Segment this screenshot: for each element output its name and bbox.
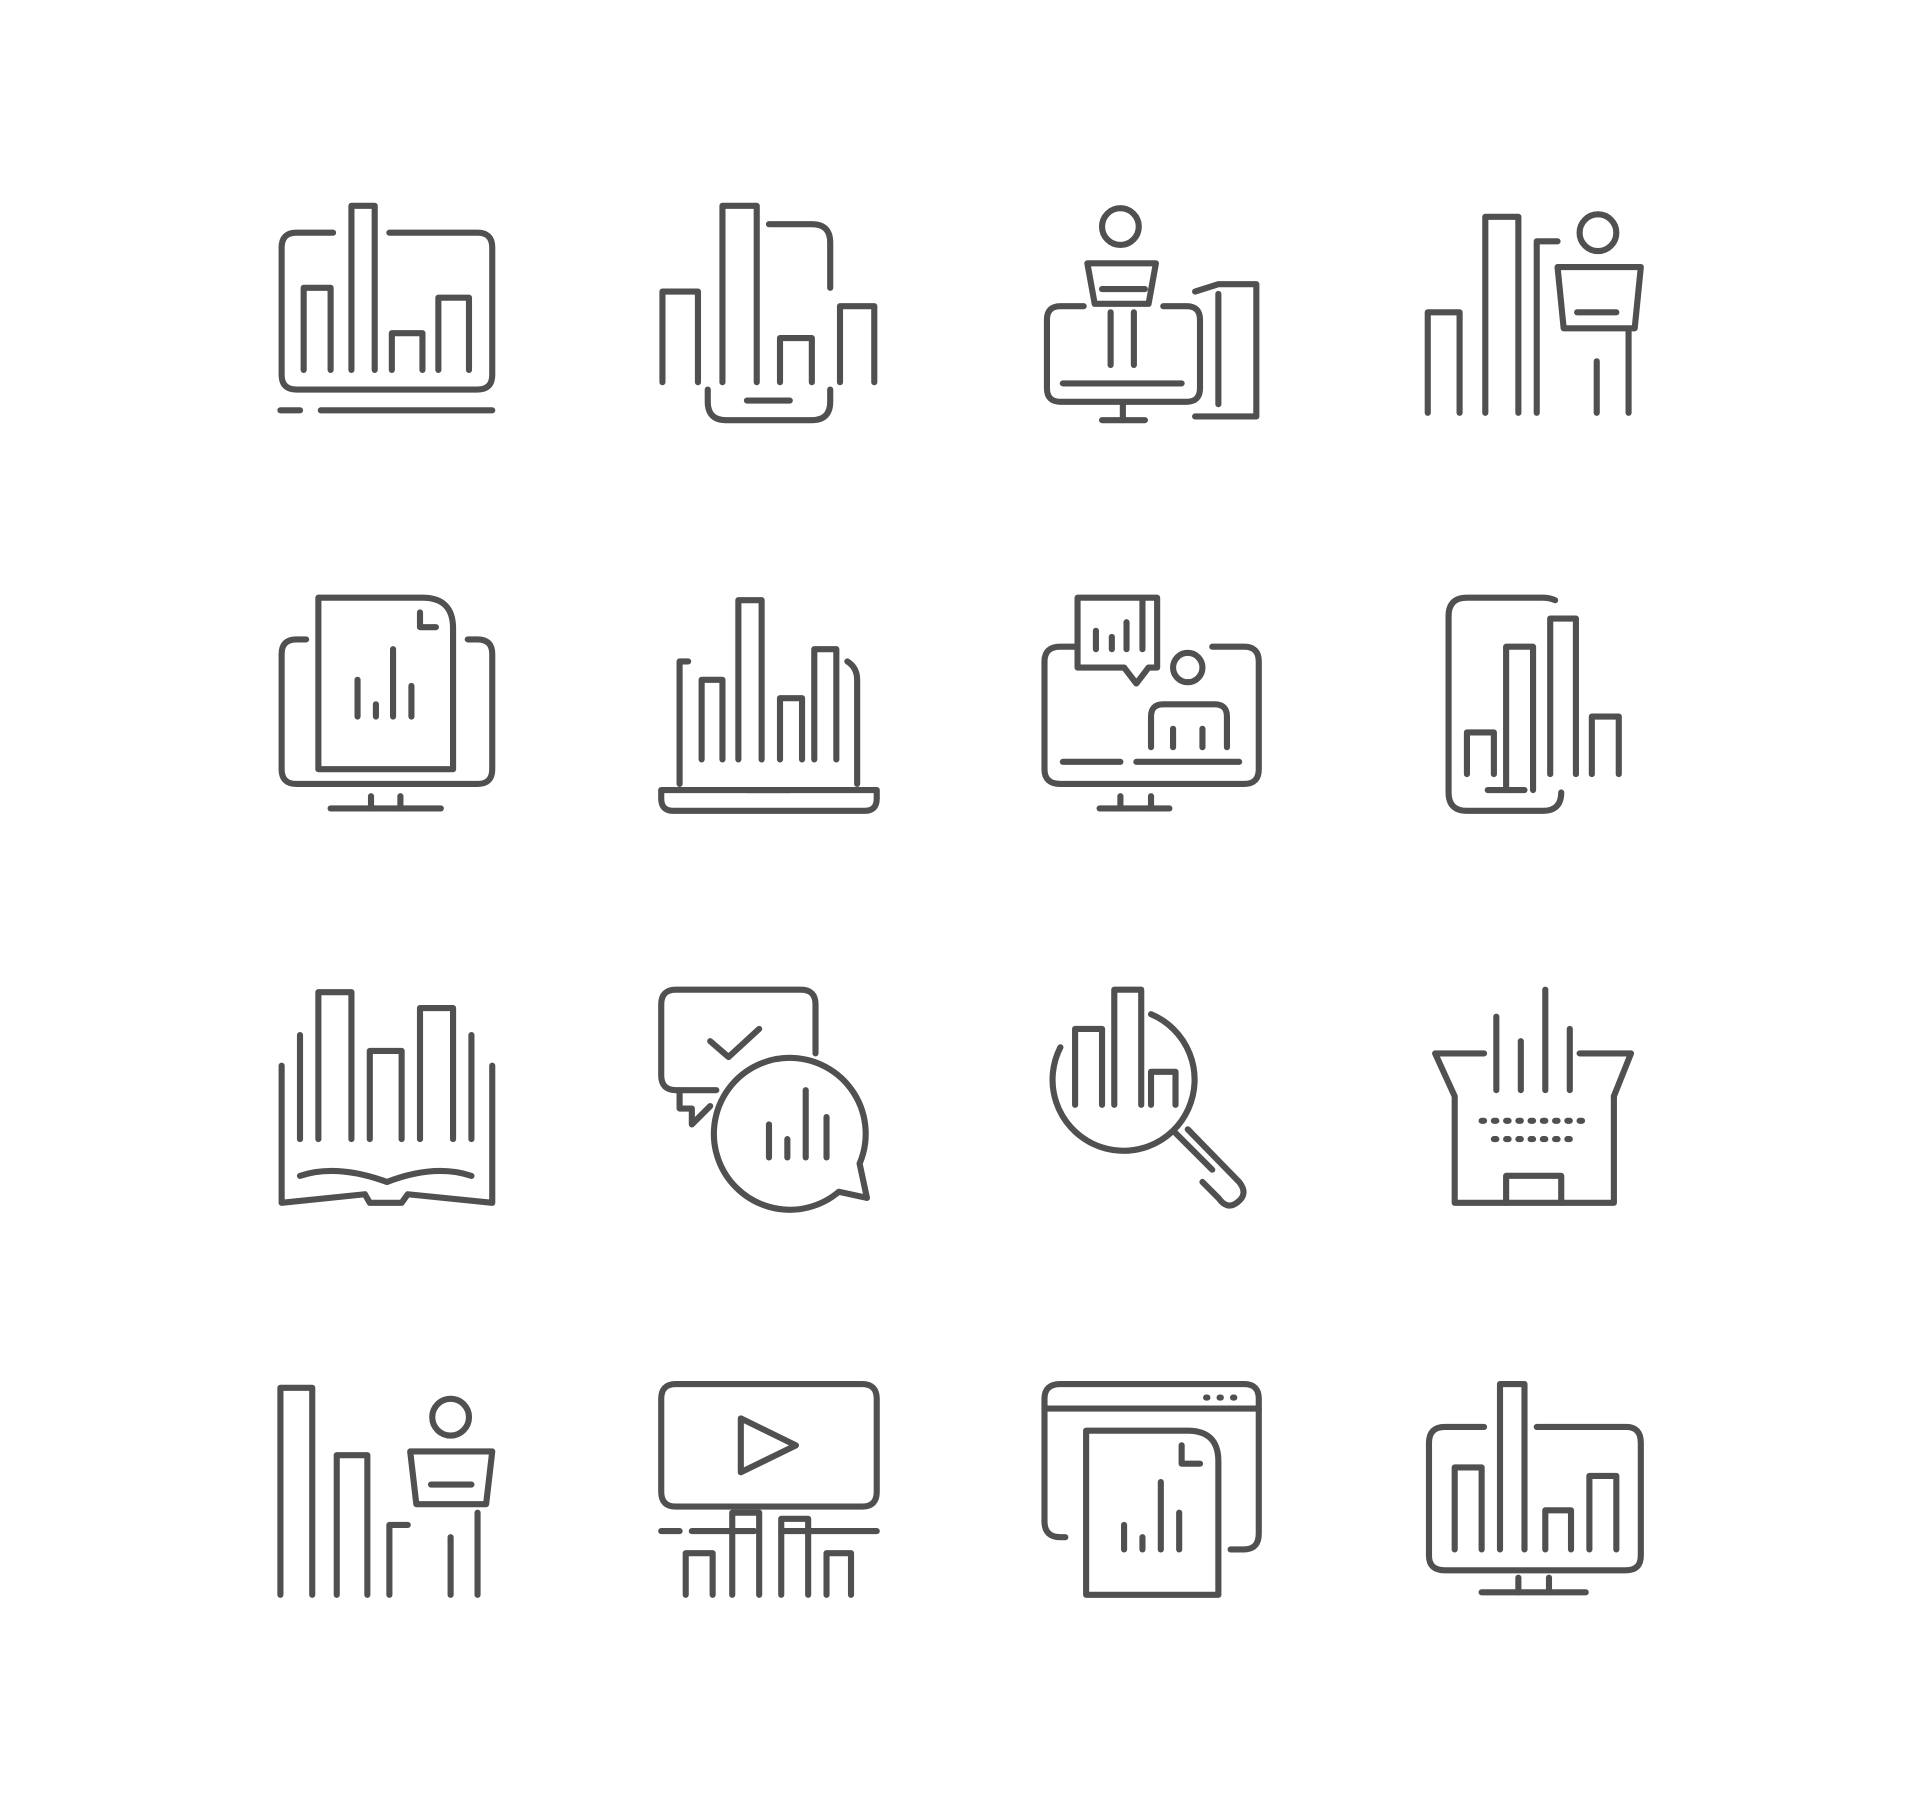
icon: video chart	[661, 1384, 877, 1595]
icon: magnifier chart	[1053, 990, 1244, 1206]
icon: laptop bar chart	[661, 600, 877, 811]
icon: phone bar chart	[662, 206, 874, 420]
icon: book with bars	[282, 992, 492, 1203]
icon: chat analysis	[661, 990, 867, 1210]
icon: browser document	[1044, 1384, 1259, 1595]
icon: monitor chart	[1429, 1384, 1641, 1592]
icon: person with chart	[280, 1388, 492, 1595]
icon: person at monitor	[1047, 208, 1256, 420]
icon: phone with bars	[1449, 598, 1619, 811]
icon: video call chart	[1044, 598, 1259, 808]
icon: monitor with document	[282, 598, 492, 808]
icon: person with bars	[1428, 214, 1641, 413]
icon: monitor bar chart	[280, 206, 492, 410]
icon: open box	[1435, 990, 1631, 1203]
